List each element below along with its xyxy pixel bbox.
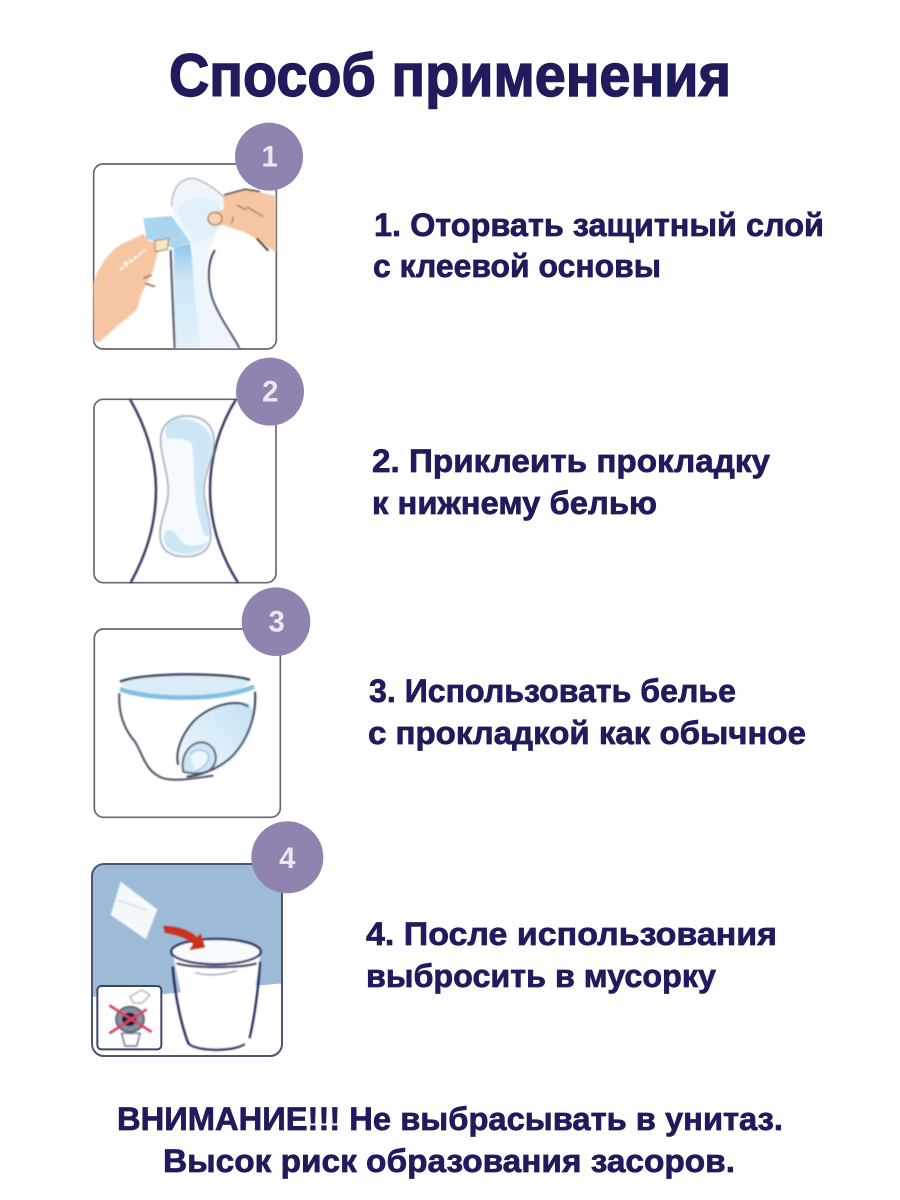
step 3 instruction: 3. Использовать белье xyxy=(369,673,736,709)
title: Способ применения xyxy=(169,42,731,109)
warning text xyxy=(117,1101,783,1179)
icon: folded used pad xyxy=(111,882,157,939)
step 4 frame with blue backdrop xyxy=(92,864,282,1056)
step 4 number badge xyxy=(251,821,323,893)
step 2 number badge xyxy=(236,358,304,426)
panel: step 2 xyxy=(94,358,304,583)
step 4 instruction: 4. После использования xyxy=(366,916,777,952)
step 2 instruction: 2. Приклеить прокладку xyxy=(372,443,770,479)
step 3 number badge xyxy=(242,587,310,656)
step 2 instruction xyxy=(372,443,770,521)
step 1 instruction: с клеевой основы xyxy=(373,248,661,284)
step 4 instruction xyxy=(366,916,777,994)
step 1 illustration: hands peeling the protective layer xyxy=(93,178,276,348)
step 3 instruction: с прокладкой как обычное xyxy=(368,715,806,751)
step 2 number badge: 2 xyxy=(262,376,278,409)
step 3 number badge: 3 xyxy=(269,606,285,639)
icon: no flushing in toilet xyxy=(97,986,161,1049)
step 3 instruction xyxy=(368,673,806,751)
step 1 frame xyxy=(94,164,276,349)
icon: waste bin xyxy=(171,939,261,1050)
warning text: ВНИМАНИЕ!!! Не выбрасывать в унитаз. xyxy=(117,1101,783,1137)
arrow: into bin xyxy=(163,926,205,950)
step 3 illustration: underwear with pad xyxy=(119,674,255,780)
step 2 instruction: к нижнему белью xyxy=(372,485,657,521)
step 1 instruction: 1. Оторвать защитный слой xyxy=(374,207,824,243)
panel: step 3 xyxy=(94,587,310,817)
step 3 frame xyxy=(94,629,280,817)
panel: step 1 xyxy=(93,123,303,349)
step 4 number badge: 4 xyxy=(279,842,296,875)
step 1 number badge xyxy=(235,123,303,191)
step 2 illustration: pad on underwear xyxy=(130,399,238,583)
step 4 instruction: выбросить в мусорку xyxy=(366,958,716,994)
step 1 instruction xyxy=(373,207,824,284)
step 1 number badge: 1 xyxy=(262,141,278,174)
panel: step 4 xyxy=(92,821,323,1056)
warning text: Высок риск образования засоров. xyxy=(163,1143,735,1179)
step 2 frame xyxy=(94,399,276,583)
